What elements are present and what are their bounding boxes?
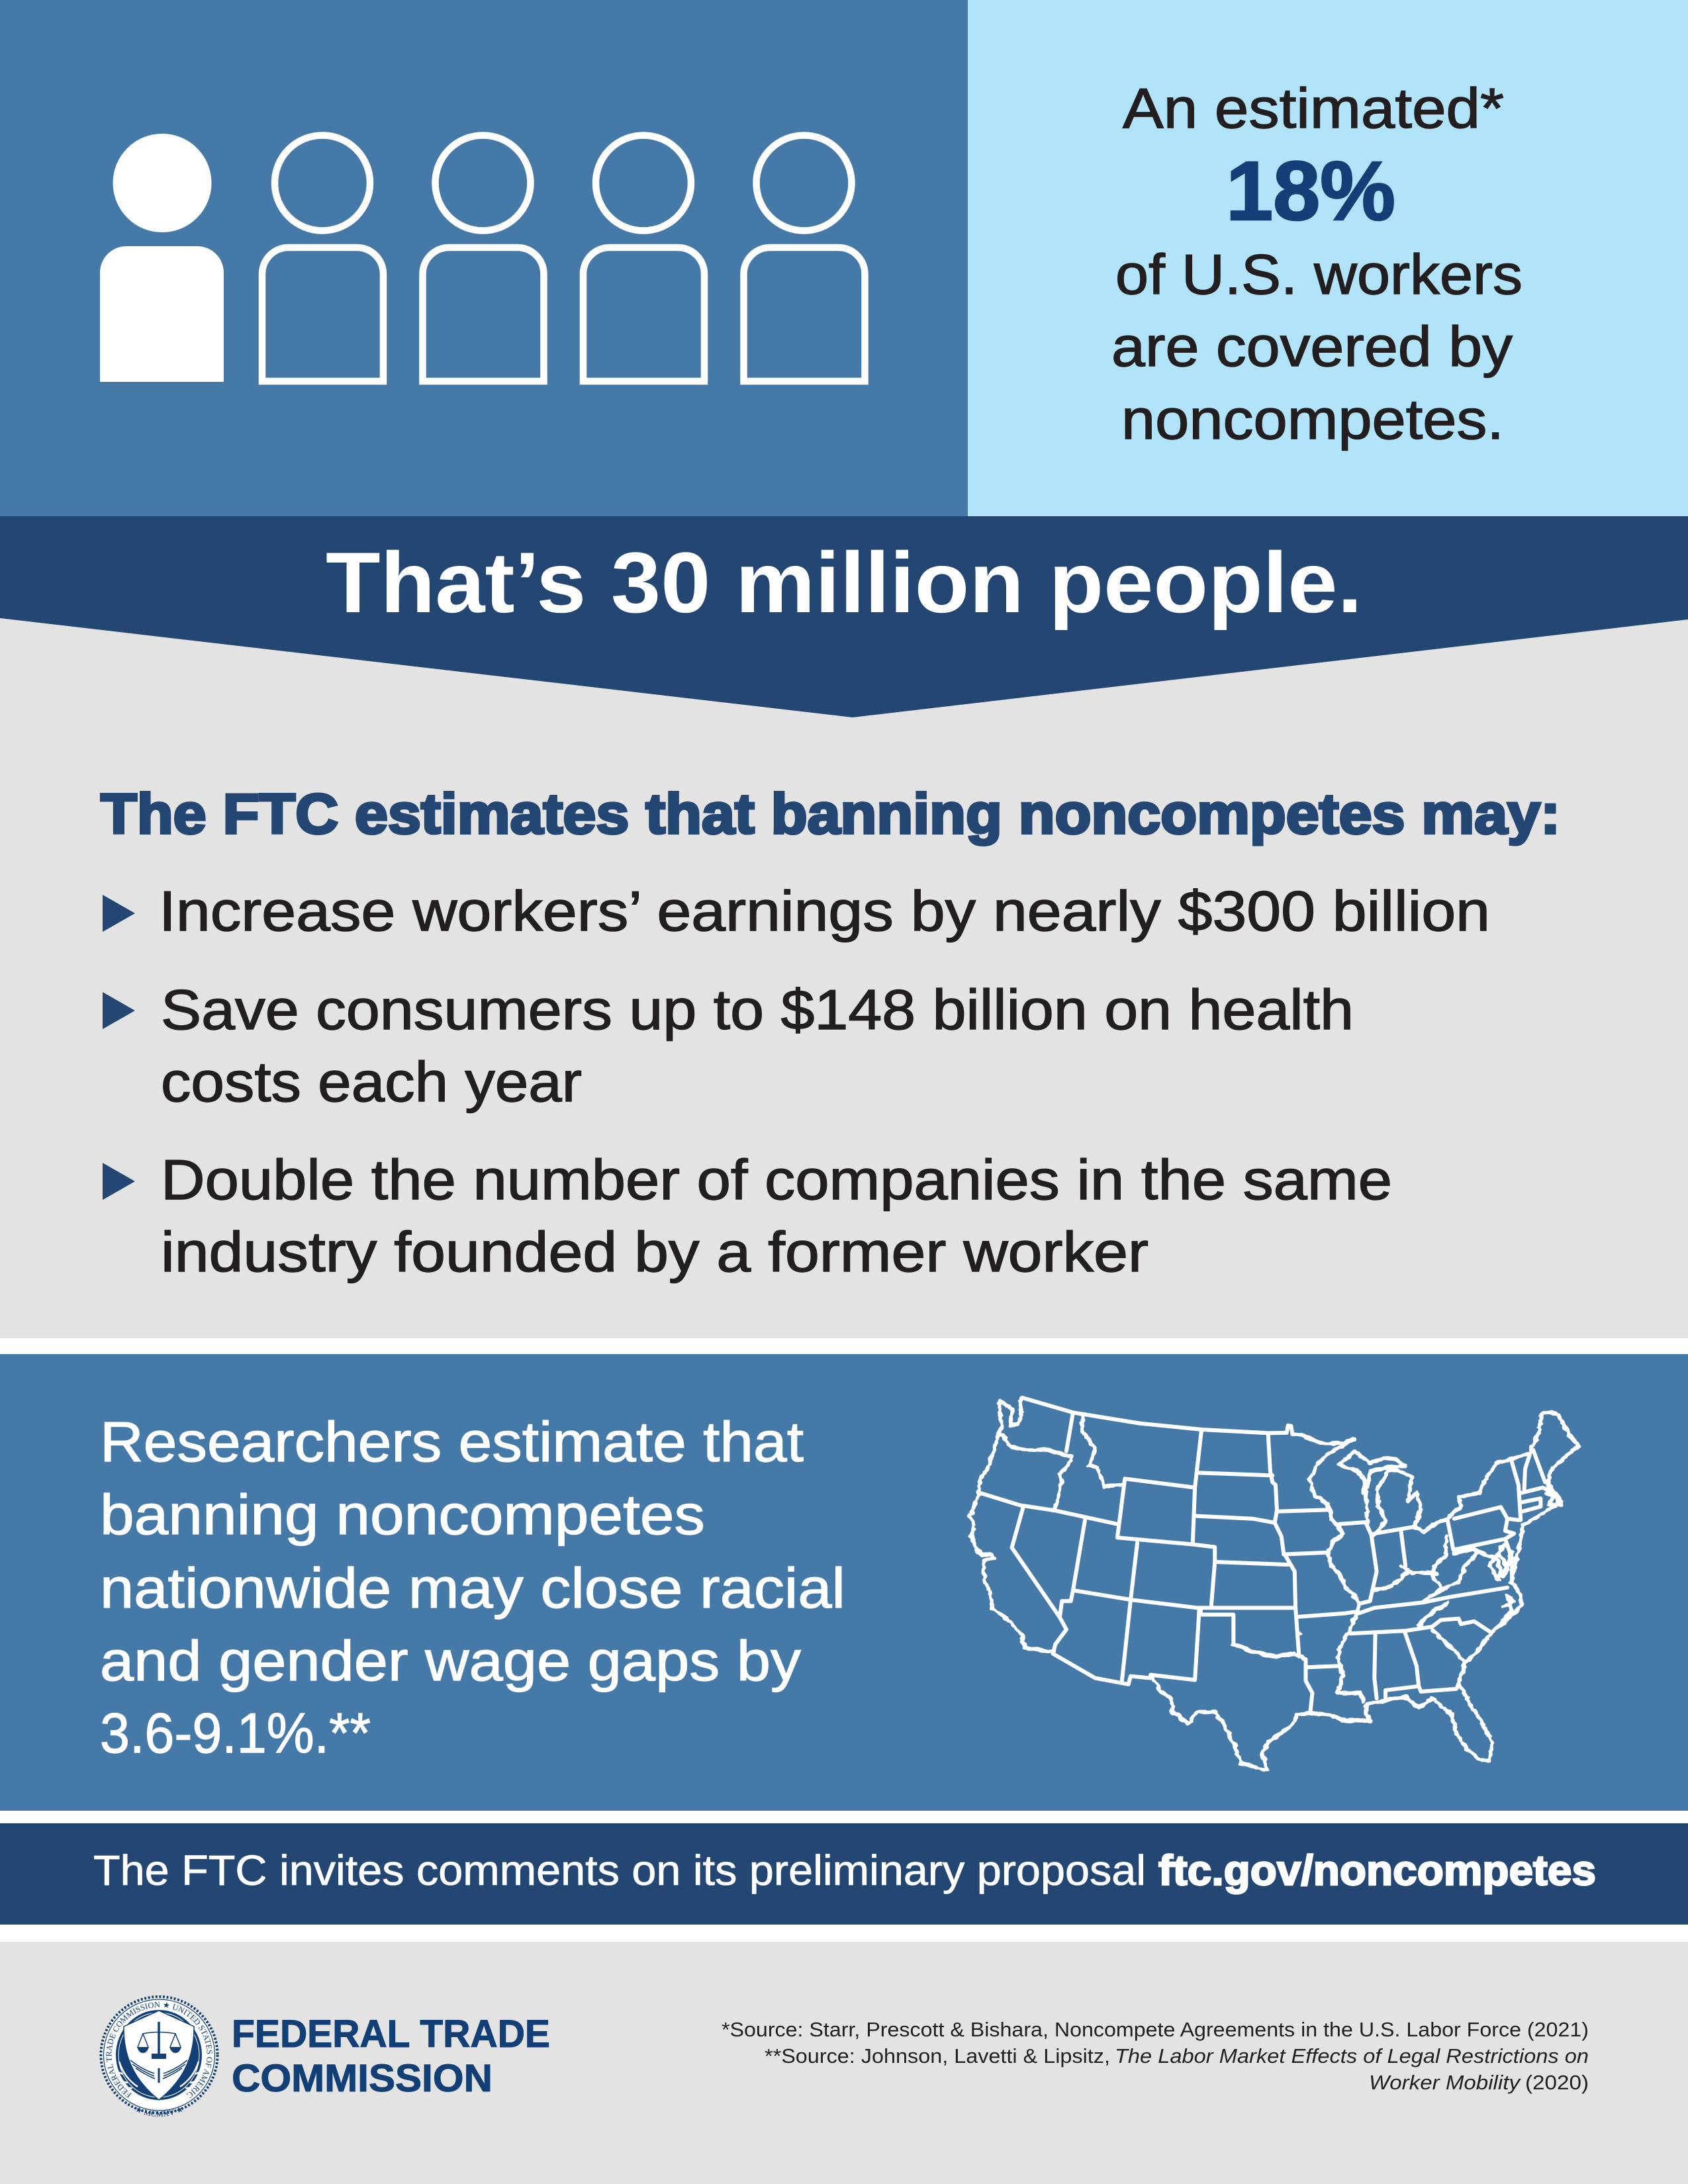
logo: Federal Trade Commission wordmark (232, 2013, 550, 2100)
logo: Federal Trade Commission wordmark: COMMISSION (232, 2057, 492, 2100)
logo: FTC seal: ★ MCMXV ★ (136, 2107, 183, 2116)
heading: FTC estimates: The FTC estimates that banning noncompetes may: (101, 783, 1560, 846)
text: researchers estimate: nationwide may close racial (100, 1557, 845, 1620)
text: source citations: Worker Mobility (1369, 2071, 1522, 2094)
banner: comment invitation: ftc.gov/noncompetes (1158, 1846, 1596, 1894)
text: researchers estimate: banning noncompetes (100, 1484, 705, 1547)
text: source citations: **Source: Johnson, Lavetti & Lipsitz, (765, 2044, 1110, 2068)
text: source citations: (2020) (1525, 2071, 1589, 2094)
icon: outlined person 3 (583, 135, 704, 381)
bullet: health costs: costs each year (161, 1051, 582, 1114)
text: source citations (722, 2018, 1589, 2094)
bullet: new companies (103, 1149, 1392, 1284)
text: noncompetes: noncompetes. (1121, 388, 1504, 451)
logo: FTC seal (99, 1995, 218, 2116)
panel: wage gaps (0, 1354, 1688, 1811)
icon: US map (970, 1398, 1578, 1770)
text: researchers estimate: 3.6-9.1%.** (100, 1702, 371, 1765)
text: source citations: *Source: Starr, Prescott & Bishara, Noncompete Agreements in the U.S. Labor Force (2021) (722, 2018, 1589, 2041)
icon: outlined person 2 (422, 135, 544, 381)
text: researchers estimate (100, 1411, 845, 1765)
panel: benefits background (0, 516, 1688, 1338)
bullet: earnings: Increase workers’ earnings by nearly $300 billion (159, 880, 1490, 943)
bullet: new companies: industry founded by a former worker (161, 1221, 1149, 1284)
logo: FTC seal: FEDERAL TRADE COMMISSION ★ UNITED STATES OF AMERICA (106, 2001, 212, 2098)
banner: comment invitation (0, 1823, 1688, 1925)
text: source citations: The Labor Market Effects of Legal Restrictions on (1115, 2044, 1589, 2068)
icon: outlined person 1 (262, 135, 383, 381)
text: of U.S. workers: of U.S. workers (1115, 244, 1523, 306)
text: an estimated: An estimated* (1123, 77, 1504, 140)
panel: 18 percent statistic (968, 0, 1688, 516)
heading: that's 30 million people: That’s 30 million people. (326, 534, 1362, 631)
banner: comment invitation: The FTC invites comments on its preliminary proposal (93, 1846, 1146, 1894)
text: researchers estimate: and gender wage gaps by (100, 1630, 802, 1693)
text: 18 percent: 18% (1226, 144, 1395, 238)
bullet: new companies: Double the number of companies in the same (161, 1149, 1392, 1212)
bullet: health costs (103, 979, 1354, 1114)
text: researchers estimate: Researchers estimate that (100, 1411, 804, 1474)
icon: filled person (100, 134, 224, 382)
icon: outlined person 4 (744, 135, 865, 381)
bullet: health costs: Save consumers up to $148 billion on health (161, 979, 1354, 1042)
banner: 30 million people (0, 516, 1688, 717)
panel: people icons (0, 0, 968, 516)
text: are covered by: are covered by (1111, 316, 1513, 379)
logo: Federal Trade Commission wordmark: FEDERAL TRADE (232, 2013, 550, 2056)
